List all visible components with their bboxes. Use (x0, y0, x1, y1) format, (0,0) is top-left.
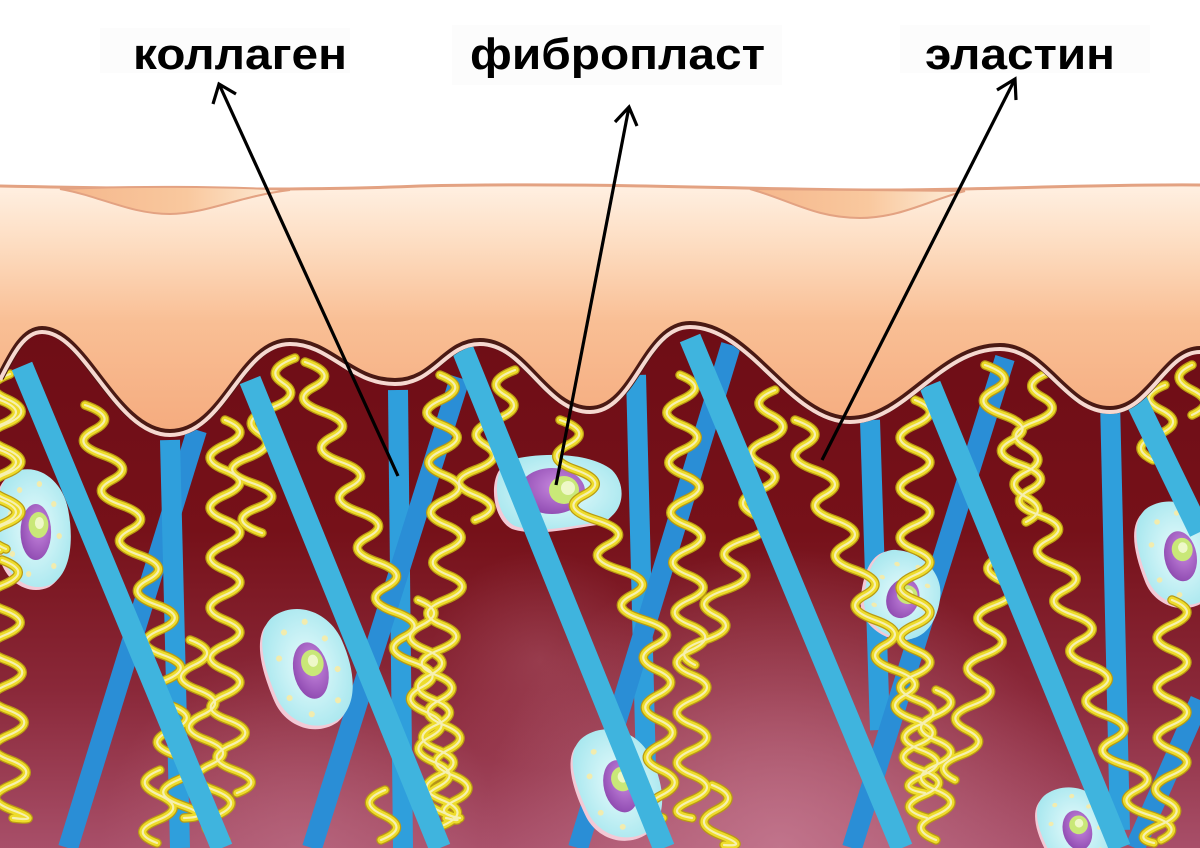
front collagen fibers (22, 338, 1200, 848)
skin surface line (0, 185, 1200, 190)
fibroblast cell: right edge (1134, 502, 1200, 608)
arrow: collagen (213, 84, 398, 476)
elastin fibers (0, 358, 1200, 845)
arrow: fibroblast (556, 107, 637, 485)
label: collagen: коллаген (133, 30, 347, 79)
fibroblast cell: centre (494, 455, 622, 532)
fibroblast cell: left edge (0, 469, 71, 590)
panel: dermis (0, 320, 1200, 848)
fibroblast cell: bottom centre (570, 730, 662, 841)
arrow: elastin (822, 79, 1016, 460)
basement membrane (0, 325, 1200, 433)
deep collagen fibers (68, 345, 1200, 848)
fibroblast cell: bottom right (1035, 787, 1108, 848)
panel: skin epidermis (0, 185, 1200, 435)
label: elastin: эластин (925, 30, 1115, 79)
skin wrinkle right (750, 189, 965, 218)
fibroblast cell: right centre (860, 550, 940, 640)
label: fibroblast: фибропласт (470, 30, 765, 79)
skin wrinkle left (60, 187, 290, 214)
fibroblast cell: lower left (260, 609, 353, 730)
